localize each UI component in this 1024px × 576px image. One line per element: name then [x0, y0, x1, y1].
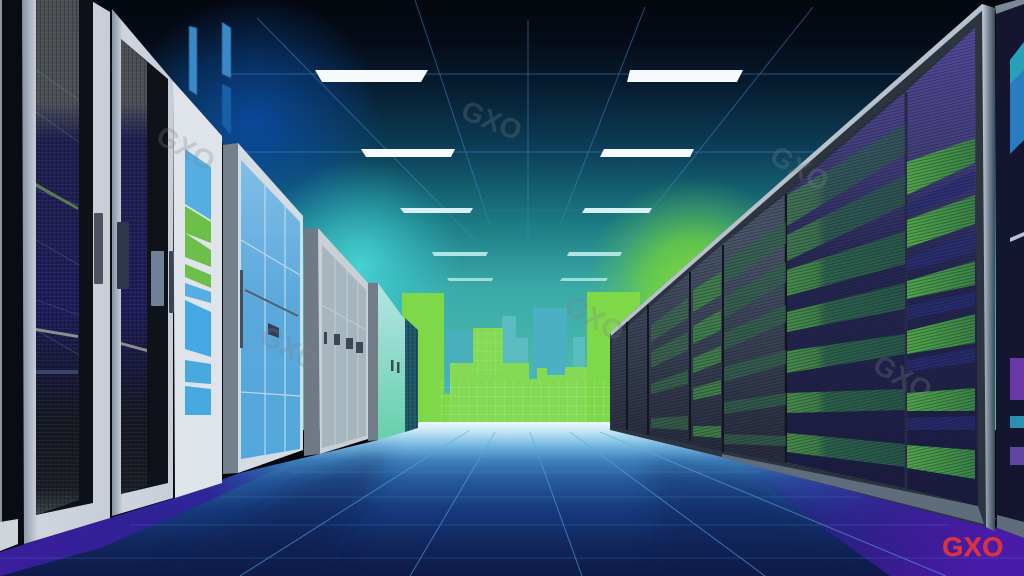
watermarks: GXO — [457, 94, 526, 146]
watermarks — [151, 94, 937, 406]
watermarks: GXO — [868, 348, 937, 406]
server panels — [612, 28, 978, 506]
far right server unit — [995, 0, 1024, 538]
ceiling backdrop — [0, 0, 1024, 430]
panel dividers — [627, 92, 906, 488]
watermarks: GXO — [560, 289, 629, 347]
logo: GXO: GXO — [942, 532, 1004, 562]
bottom rail — [722, 454, 984, 524]
watermarks: GXO — [765, 139, 834, 197]
green status bands — [612, 28, 978, 506]
city skyline — [402, 292, 640, 422]
floor grid lines — [0, 430, 1024, 576]
watermarks: GXO — [151, 119, 220, 177]
left rack: second door — [112, 9, 176, 516]
left rack: gray cabinet — [304, 228, 368, 456]
left rack: mint cabinet — [368, 283, 405, 441]
glowing blue data columns — [189, 22, 231, 135]
floor — [0, 422, 1024, 576]
ceiling grid lines — [225, 0, 905, 260]
left rack: back shell — [0, 0, 223, 552]
left rack: dark teal cabinet — [405, 318, 418, 432]
watermarks: GXO — [255, 319, 324, 377]
ceiling lights — [315, 70, 743, 281]
left rack: first door — [22, 0, 110, 544]
left rack: blue glass cabinet — [223, 143, 303, 474]
corner post — [982, 4, 995, 532]
left rack: white panel with status stripes — [173, 81, 222, 498]
right rack wall — [610, 4, 995, 532]
wall frame — [610, 4, 995, 532]
left rack: far edge unit — [0, 0, 21, 551]
